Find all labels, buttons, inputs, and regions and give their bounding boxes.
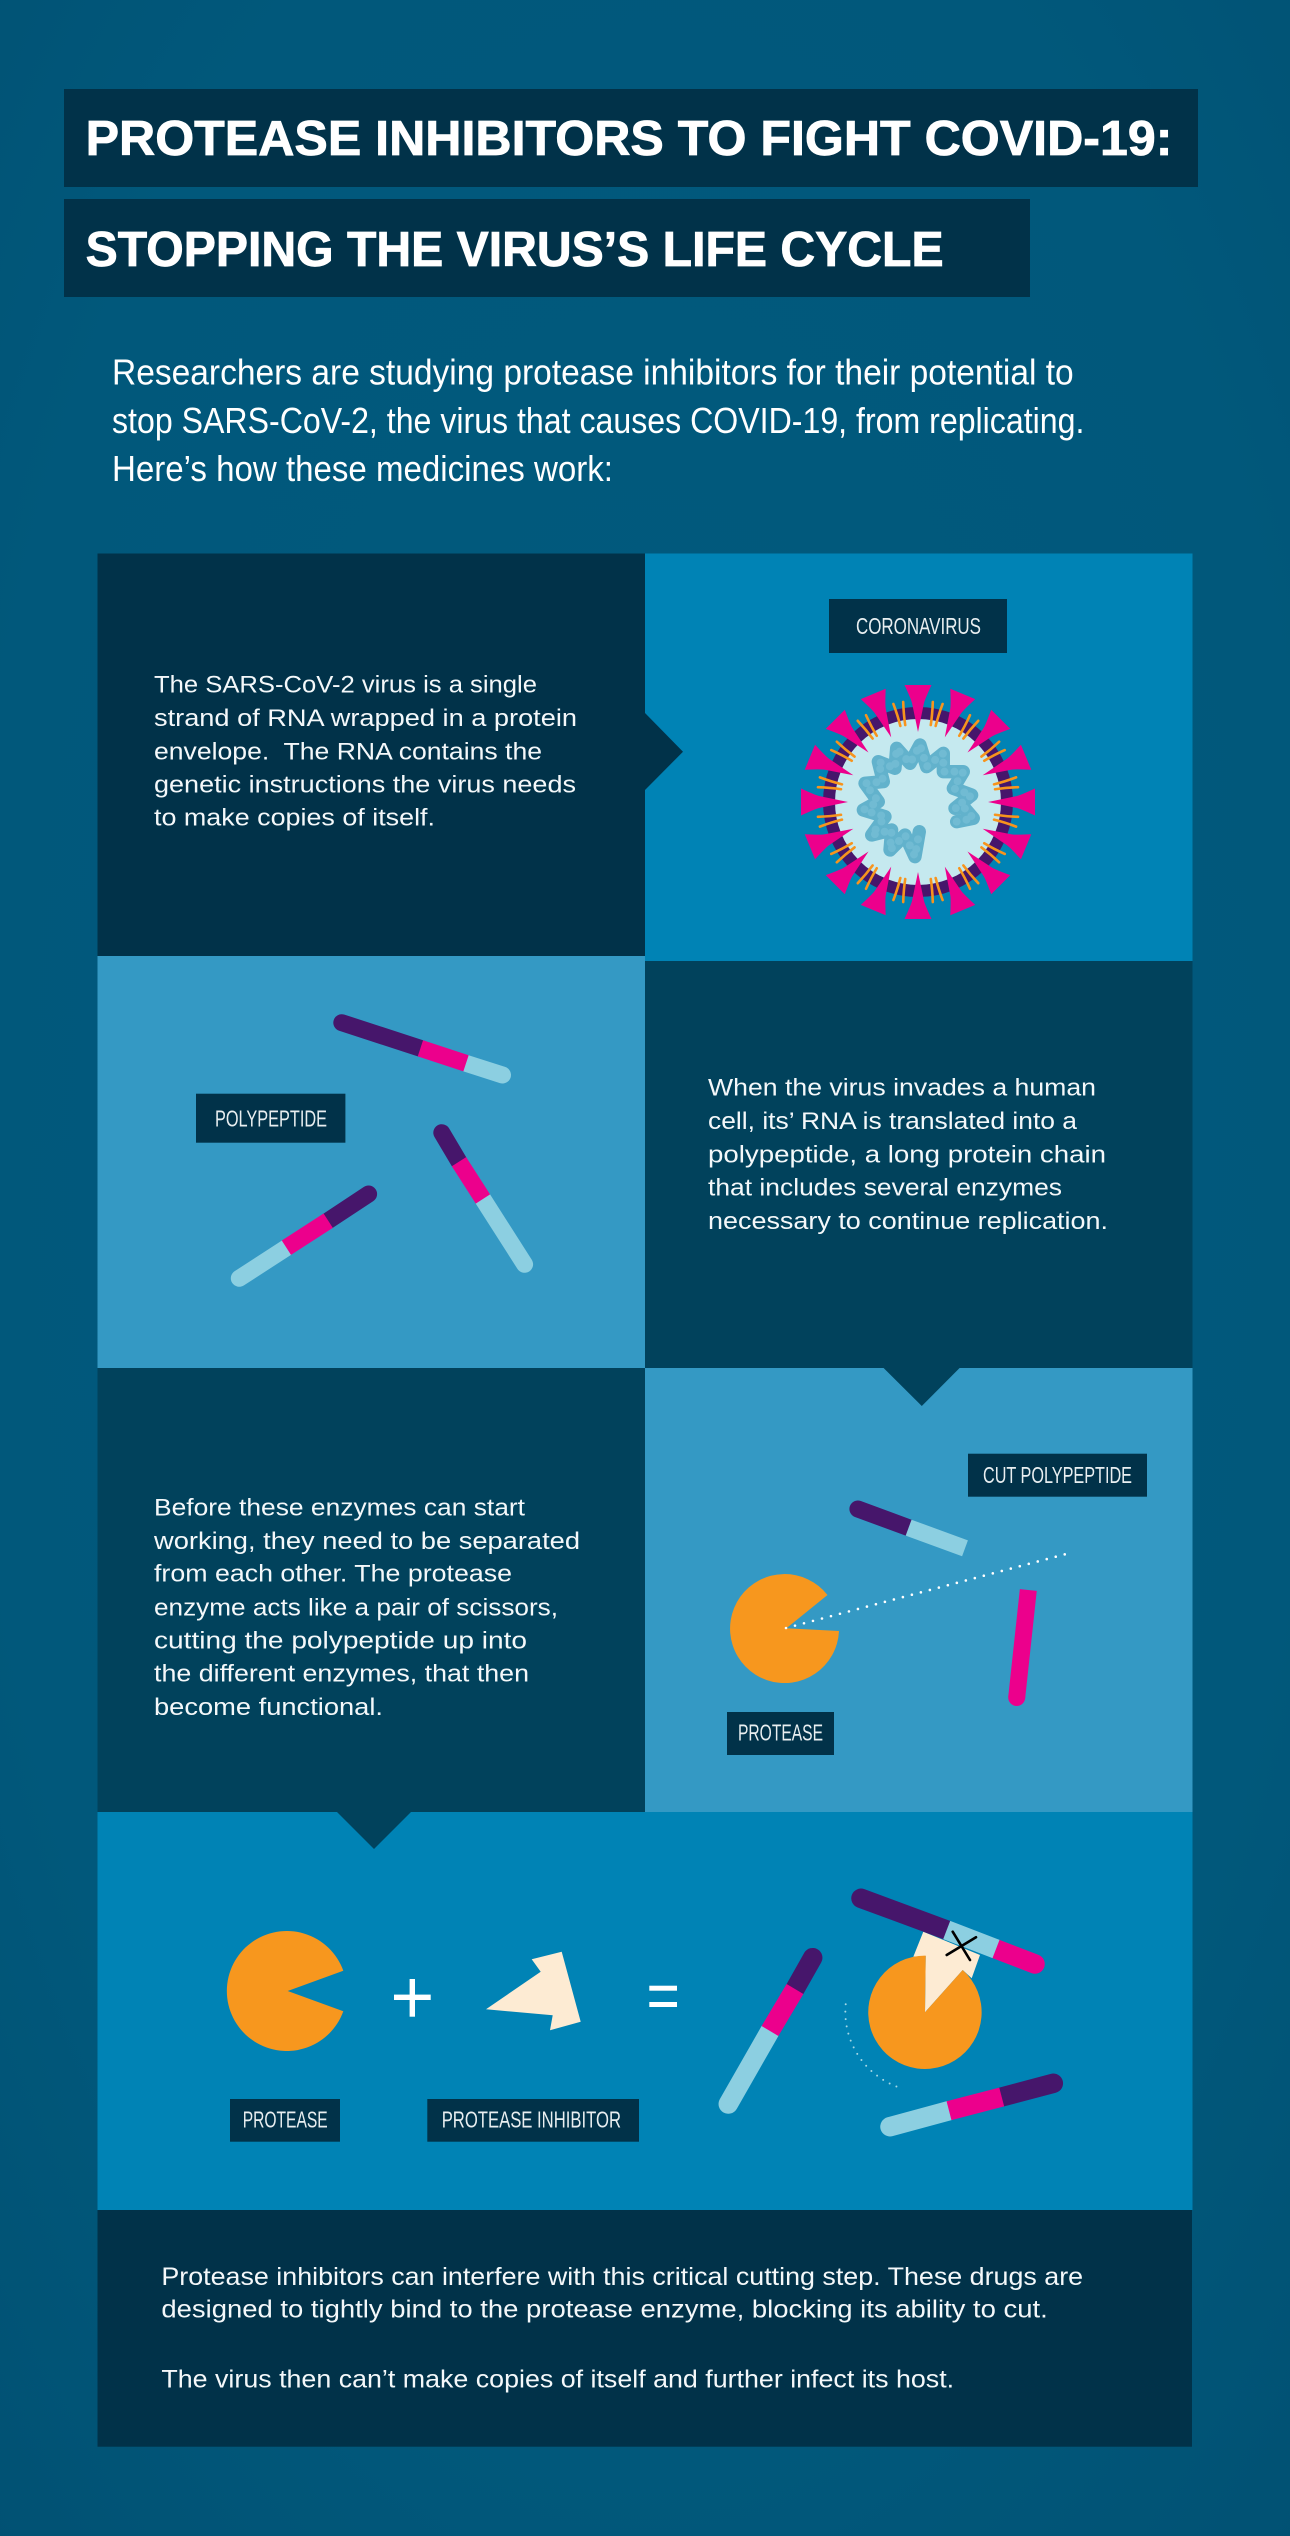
- dotted line: [786, 1553, 1069, 1628]
- label: polypeptide: POLYPEPTIDE: [215, 1106, 327, 1132]
- label: coronavirus: [829, 599, 1007, 653]
- panel: polypeptide: [98, 956, 645, 1368]
- panel: coronavirus: [645, 554, 1192, 961]
- icon: protease: [730, 1574, 839, 1683]
- text: cutting description: the different enzymes, that then: [154, 1661, 529, 1688]
- dotted rotation arc: [845, 2004, 902, 2088]
- panel: protease inhibitor: [98, 1812, 1192, 2210]
- text: cutting description: cutting the polypeptide up into: [154, 1627, 527, 1654]
- text: conclusion: designed to tightly bind to the protease enzyme, blocking its ability to cut.: [161, 2296, 1048, 2324]
- text: cutting description: become functional.: [154, 1694, 383, 1721]
- arrow: panel 1 to virus: [645, 713, 683, 790]
- panel: translation description: [645, 961, 1192, 1368]
- text: virus description: envelope. The RNA contains the: [154, 738, 542, 765]
- label: protease: [727, 1712, 834, 1755]
- label: protease: [230, 2099, 340, 2142]
- intro text: Researchers are studying protease inhibitors for their potential to: [112, 352, 1074, 393]
- title: [64, 89, 1198, 297]
- arrow: panel 2 down: [884, 1368, 960, 1406]
- text: translation description: that includes several enzymes: [708, 1175, 1062, 1202]
- equals sign: [649, 1986, 677, 2007]
- plus sign: [394, 1979, 431, 2017]
- bar: free polypeptide left: [728, 1958, 813, 2104]
- label: protease: PROTEASE: [243, 2107, 328, 2133]
- text: cutting description: Before these enzymes can start: [154, 1495, 525, 1522]
- bar: cut polypeptide segment: [858, 1509, 965, 1548]
- label: cut polypeptide: CUT POLYPEPTIDE: [983, 1462, 1132, 1488]
- text: conclusion: The virus then can’t make copies of itself and further infect its host.: [161, 2365, 954, 2393]
- text: conclusion: [161, 2263, 1083, 2393]
- bar: polypeptide 2: [442, 1133, 525, 1264]
- panel: conclusion: [98, 2210, 1192, 2447]
- title line 2: STOPPING THE VIRUS’S LIFE CYCLE: [86, 223, 944, 277]
- label: protease: PROTEASE: [738, 1720, 823, 1746]
- label: protease inhibitor: PROTEASE INHIBITOR: [442, 2107, 621, 2133]
- icon: blocked cut mark: [947, 1932, 976, 1960]
- icon: protease: [227, 1931, 343, 2051]
- text: translation description: necessary to continue replication.: [708, 1208, 1108, 1235]
- bar: polypeptide 3: [239, 1194, 369, 1278]
- title line 1: [64, 89, 1198, 187]
- panel: protease cutting: [645, 1368, 1192, 1812]
- bar: cut magenta segment: [1008, 1590, 1028, 1706]
- title line 1: PROTEASE INHIBITORS TO FIGHT COVID-19:: [86, 112, 1172, 166]
- label: coronavirus: CORONAVIRUS: [856, 613, 981, 639]
- label: protease inhibitor: [427, 2099, 639, 2142]
- bar: free polypeptide bottom: [890, 2083, 1053, 2127]
- intro text: Here’s how these medicines work:: [112, 448, 613, 489]
- bar: blocked polypeptide: [861, 1898, 1035, 1964]
- panel: cutting description: [98, 1368, 645, 1812]
- label: polypeptide: [196, 1094, 345, 1143]
- text: translation description: [708, 1075, 1108, 1235]
- label: cut polypeptide: [968, 1454, 1147, 1497]
- text: virus description: to make copies of itself.: [154, 804, 435, 831]
- intro text: [112, 352, 1084, 489]
- panel: virus description: [98, 554, 646, 956]
- text: virus description: [154, 672, 577, 831]
- text: cutting description: working, they need to be separated: [153, 1528, 580, 1555]
- text: virus description: The SARS-CoV-2 virus is a single: [154, 672, 537, 699]
- text: translation description: polypeptide, a long protein chain: [708, 1141, 1106, 1168]
- title line 2: [64, 199, 1030, 297]
- text: virus description: strand of RNA wrapped in a protein: [154, 705, 577, 732]
- text: cutting description: from each other. The protease: [154, 1561, 512, 1588]
- icon: coronavirus: [801, 685, 1035, 919]
- arrow: panel 3 down: [336, 1811, 412, 1849]
- text: translation description: cell, its’ RNA is translated into a: [708, 1108, 1078, 1135]
- text: cutting description: [153, 1495, 580, 1721]
- icon: protease inhibitor: [486, 1952, 581, 2030]
- text: conclusion: Protease inhibitors can interfere with this critical cutting step. These drugs are: [161, 2263, 1083, 2291]
- icon: inhibitor bound to protease: [868, 1932, 982, 2069]
- bar: polypeptide 1: [342, 1023, 502, 1075]
- text: translation description: When the virus invades a human: [708, 1075, 1096, 1102]
- intro text: stop SARS-CoV-2, the virus that causes COVID-19, from replicating.: [112, 400, 1084, 441]
- text: virus description: genetic instructions the virus needs: [154, 772, 576, 799]
- text: cutting description: enzyme acts like a pair of scissors,: [154, 1595, 558, 1622]
